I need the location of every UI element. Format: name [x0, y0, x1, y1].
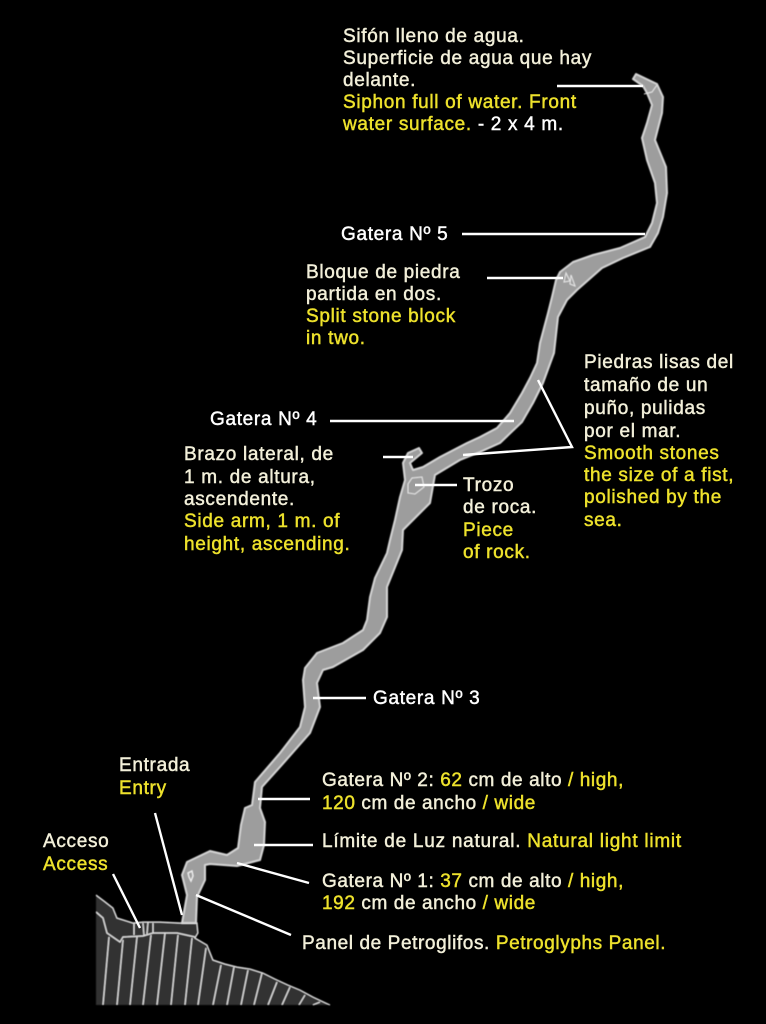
label: side arm: 1 m. de altura,	[184, 467, 316, 488]
label: siphon: Sifón lleno de agua.	[343, 26, 525, 47]
label: gatera 2: 120	[322, 793, 356, 814]
label: gatera 5: Gatera Nº 5	[341, 224, 448, 245]
label: entry: Entry	[119, 778, 167, 799]
label: smooth stones: por el mar.	[584, 421, 681, 442]
label: gatera 3: Gatera Nº 3	[373, 688, 480, 709]
label: split block: Bloque de piedra	[306, 262, 461, 283]
split block outline	[564, 273, 575, 286]
label: siphon: - 2 x 4 m.	[472, 114, 564, 135]
label: split block: Split stone block	[306, 306, 456, 327]
skylight outline	[188, 871, 193, 881]
label: side arm: Brazo lateral, de	[184, 444, 334, 465]
label: siphon: water surface.	[342, 114, 472, 135]
water surface	[644, 85, 657, 94]
label: gatera 1: cm de ancho / wide	[361, 893, 536, 914]
label: natural light limit: Límite de Luz natural. Natural light limit	[322, 831, 682, 852]
leader lines	[113, 86, 645, 935]
label: piece of rock: of rock.	[463, 542, 531, 563]
label: smooth stones: puño, pulidas	[584, 398, 706, 419]
label: gatera 4: Gatera Nº 4	[210, 409, 317, 430]
label: entry: Entrada	[119, 755, 190, 776]
label: gatera 1: 192	[322, 893, 356, 914]
label: petroglyphs panel: Panel de Petroglifos. Petroglyphs Panel.	[302, 933, 666, 954]
label: smooth stones: sea.	[584, 510, 623, 531]
label: piece of rock: de roca.	[463, 497, 537, 518]
label: split block: in two.	[306, 328, 366, 349]
label: smooth stones: Smooth stones	[584, 443, 720, 464]
label: piece of rock: Piece	[463, 520, 514, 541]
label: split block: partida en dos.	[306, 284, 442, 305]
label: siphon: delante.	[343, 70, 416, 91]
rock piece outline	[408, 477, 424, 494]
label: gatera 1: Gatera Nº 1: 37 cm de alto / high,	[322, 871, 624, 892]
label: smooth stones: tamaño de un	[584, 375, 708, 396]
cave passage plan	[182, 74, 667, 923]
label: access: Access	[43, 854, 108, 875]
label: side arm: ascendente.	[184, 489, 295, 510]
label: gatera 2: Gatera Nº 2: 62 cm de alto / high,	[322, 770, 624, 791]
cliff hatching at entrance	[96, 895, 330, 1005]
label: smooth stones: the size of a fist,	[584, 465, 734, 486]
label: access: Acceso	[43, 831, 109, 852]
label: side arm: Side arm, 1 m. of	[184, 511, 340, 532]
label: side arm: height, ascending.	[184, 534, 350, 555]
label: gatera 2: cm de ancho / wide	[361, 793, 536, 814]
label: smooth stones: polished by the	[584, 487, 722, 508]
label: siphon: Superficie de agua que hay	[343, 48, 592, 69]
label: smooth stones: Piedras lisas del	[584, 352, 734, 373]
label: piece of rock: Trozo	[463, 475, 514, 496]
label: siphon: Siphon full of water. Front	[343, 92, 577, 113]
